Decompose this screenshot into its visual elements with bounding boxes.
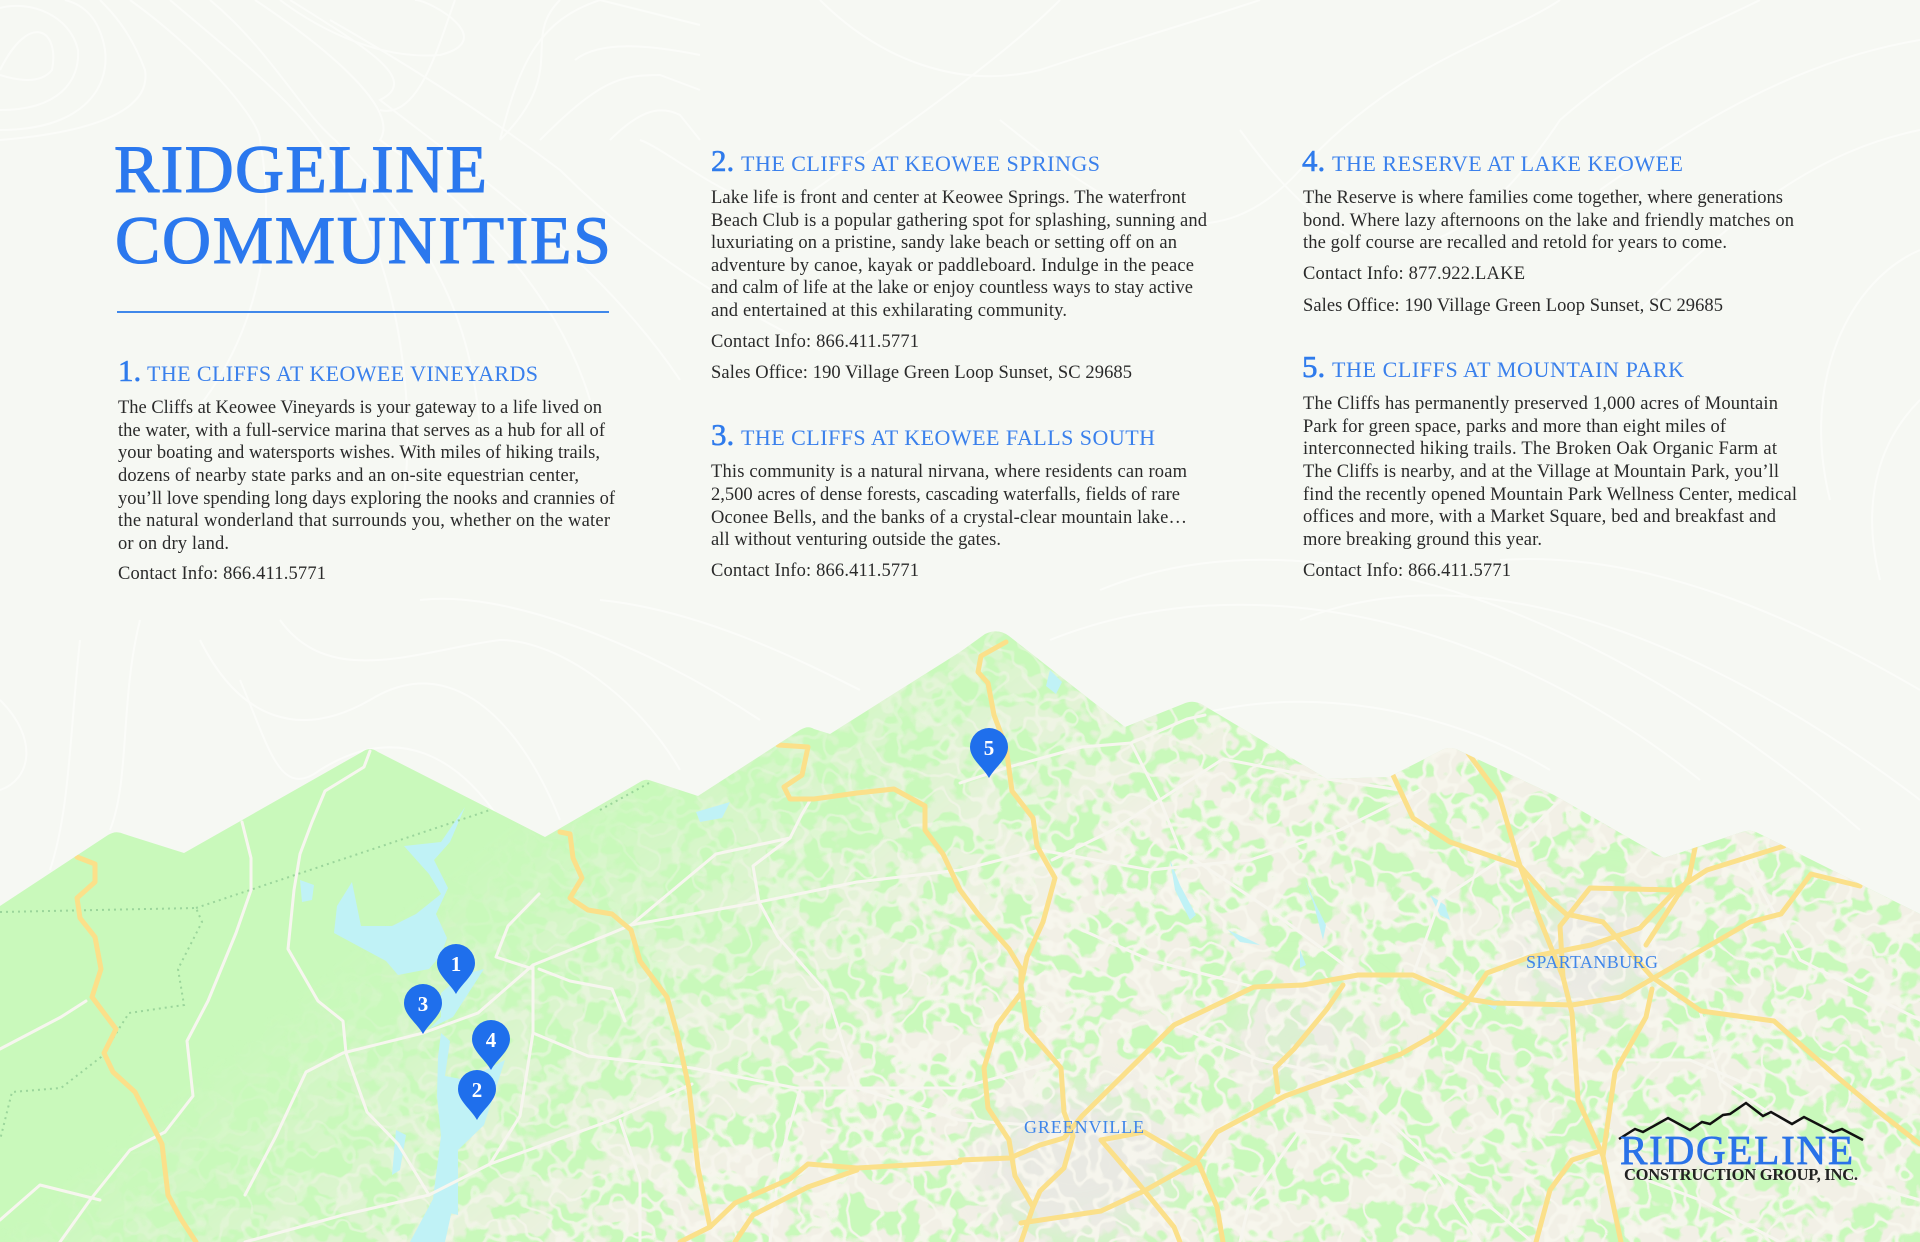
description: community 2: luxuriating on a pristine, sandy lake beach or setting off on an <box>711 233 1177 253</box>
topographic contour background <box>0 0 1920 870</box>
map pin 5 <box>970 728 1008 778</box>
green land base <box>0 620 1920 1242</box>
developed land patches <box>0 620 1920 1242</box>
title divider rule <box>117 311 609 313</box>
description: community 4: Contact Info: 877.922.LAKE <box>1303 264 1525 284</box>
description: community 1: dozens of nearby state parks and an on-site equestrian center, <box>118 466 579 486</box>
description: community 4: The Reserve is where families come together, where generations <box>1303 188 1783 208</box>
description: community 5 <box>1303 394 1797 581</box>
description: community 2 <box>711 188 1208 383</box>
heading: community 5 <box>1302 349 1684 384</box>
state boundary dotted lines <box>0 783 649 1140</box>
description: community 2: adventure by canoe, kayak or paddleboard. Indulge in the peace <box>711 256 1194 276</box>
heading: community 5: THE CLIFFS AT MOUNTAIN PARK <box>1332 357 1684 382</box>
description: community 2: and entertained at this exhilarating community. <box>711 301 1067 321</box>
heading: community 4: THE RESERVE AT LAKE KEOWEE <box>1332 151 1683 176</box>
description: community 3: all without venturing outside the gates. <box>711 530 1001 550</box>
title: COMMUNITIES <box>115 202 611 278</box>
description: community 3: Oconee Bells, and the banks of a crystal-clear mountain lake… <box>711 508 1187 528</box>
map pin 3: 3 <box>418 992 428 1016</box>
description: community 4: the golf course are recalled and retold for years to come. <box>1303 233 1727 253</box>
heading: community 4 <box>1302 143 1683 178</box>
heading: community 2: THE CLIFFS AT KEOWEE SPRINGS <box>741 151 1100 176</box>
description: community 3: This community is a natural nirvana, where residents can roam <box>711 462 1188 482</box>
heading: community 1: THE CLIFFS AT KEOWEE VINEYARDS <box>147 361 538 386</box>
map label: Spartanburg: SPARTANBURG <box>1526 952 1658 972</box>
main roads <box>0 715 1920 1242</box>
description: community 5: Contact Info: 866.411.5771 <box>1303 561 1511 581</box>
heading: community 3: THE CLIFFS AT KEOWEE FALLS SOUTH <box>741 425 1155 450</box>
description: community 5: The Cliffs is nearby, and at the Village at Mountain Park, you’ll <box>1303 462 1779 482</box>
map pin 2: 2 <box>472 1078 482 1102</box>
description: community 1: Contact Info: 866.411.5771 <box>118 564 326 584</box>
map pin 1 <box>437 944 475 994</box>
map pin 4: 4 <box>486 1028 497 1052</box>
heading: community 5: 5. <box>1302 349 1325 384</box>
heading: community 4: 4. <box>1302 143 1325 178</box>
heading: community 1: 1. <box>118 353 141 388</box>
panel: community 3 <box>711 417 1188 581</box>
map pin 3 <box>404 984 442 1034</box>
description: community 5: Park for green space, parks and more than eight miles of <box>1303 417 1727 437</box>
panel: community 2 <box>711 143 1208 383</box>
description: community 2: Contact Info: 866.411.5771 <box>711 332 919 352</box>
description: community 4: bond. Where lazy afternoons on the lake and friendly matches on <box>1303 211 1794 231</box>
heading: community 2: 2. <box>711 143 734 178</box>
description: community 2: Lake life is front and center at Keowee Springs. The waterfront <box>711 188 1187 208</box>
description: community 1 <box>118 398 616 584</box>
logo tagline: CONSTRUCTION GROUP, INC. <box>1624 1165 1858 1184</box>
panel: community 1 <box>118 353 616 584</box>
heading: community 3: 3. <box>711 417 734 452</box>
heading: community 3 <box>711 417 1155 452</box>
description: community 3 <box>711 462 1188 581</box>
title <box>114 131 611 278</box>
description: community 1: the water, with a full-service marina that serves as a hub for all of <box>118 421 606 441</box>
description: community 5: interconnected hiking trails. The Broken Oak Organic Farm at <box>1303 439 1778 459</box>
description: community 3: Contact Info: 866.411.5771 <box>711 561 919 581</box>
description: community 1: or on dry land. <box>118 534 229 554</box>
minor road network <box>0 620 1920 1242</box>
map pin 5: 5 <box>984 736 994 760</box>
description: community 5: offices and more, with a Market Square, bed and breakfast and <box>1303 507 1777 527</box>
description: community 5: find the recently opened Mountain Park Wellness Center, medical <box>1303 485 1797 505</box>
description: community 1: you’ll love spending long days exploring the nooks and crannies of <box>118 489 616 509</box>
panel: community 4 <box>1302 143 1794 316</box>
description: community 2: Beach Club is a popular gathering spot for splashing, sunning and <box>711 211 1208 231</box>
heading: community 2 <box>711 143 1100 178</box>
map of the upstate region with mountain-shaped outline <box>0 620 1920 1242</box>
description: community 2: and calm of life at the lake or enjoy countless ways to stay active <box>711 278 1193 298</box>
description: community 3: 2,500 acres of dense forests, cascading waterfalls, fields of rare <box>711 485 1180 505</box>
description: community 1: The Cliffs at Keowee Vineyards is your gateway to a life lived on <box>118 398 602 418</box>
map pin 1: 1 <box>451 952 461 976</box>
water bodies <box>300 670 1500 1242</box>
logo wordmark: RIDGELINE <box>1620 1127 1853 1173</box>
logo: Ridgeline Construction Group <box>1619 1103 1863 1184</box>
description: community 4: Sales Office: 190 Village Green Loop Sunset, SC 29685 <box>1303 296 1723 316</box>
heading: community 1 <box>118 353 538 388</box>
map pin 4 <box>472 1020 510 1070</box>
description: community 2: Sales Office: 190 Village Green Loop Sunset, SC 29685 <box>711 363 1132 383</box>
description: community 5: more breaking ground this year. <box>1303 530 1542 550</box>
map pin 2 <box>458 1070 496 1120</box>
description: community 1: your boating and watersports wishes. With miles of hiking trails, <box>118 443 600 463</box>
panel: community 5 <box>1302 349 1797 581</box>
highways <box>77 642 1920 1242</box>
title: RIDGELINE <box>114 131 487 207</box>
description: community 5: The Cliffs has permanently preserved 1,000 acres of Mountain <box>1303 394 1778 414</box>
logo mountain outline <box>1619 1103 1863 1140</box>
description: community 1: the natural wonderland that surrounds you, whether on the water <box>118 511 610 531</box>
map label: Greenville: GREENVILLE <box>1024 1117 1144 1137</box>
urban areas <box>980 900 1660 1240</box>
description: community 4 <box>1303 188 1794 316</box>
